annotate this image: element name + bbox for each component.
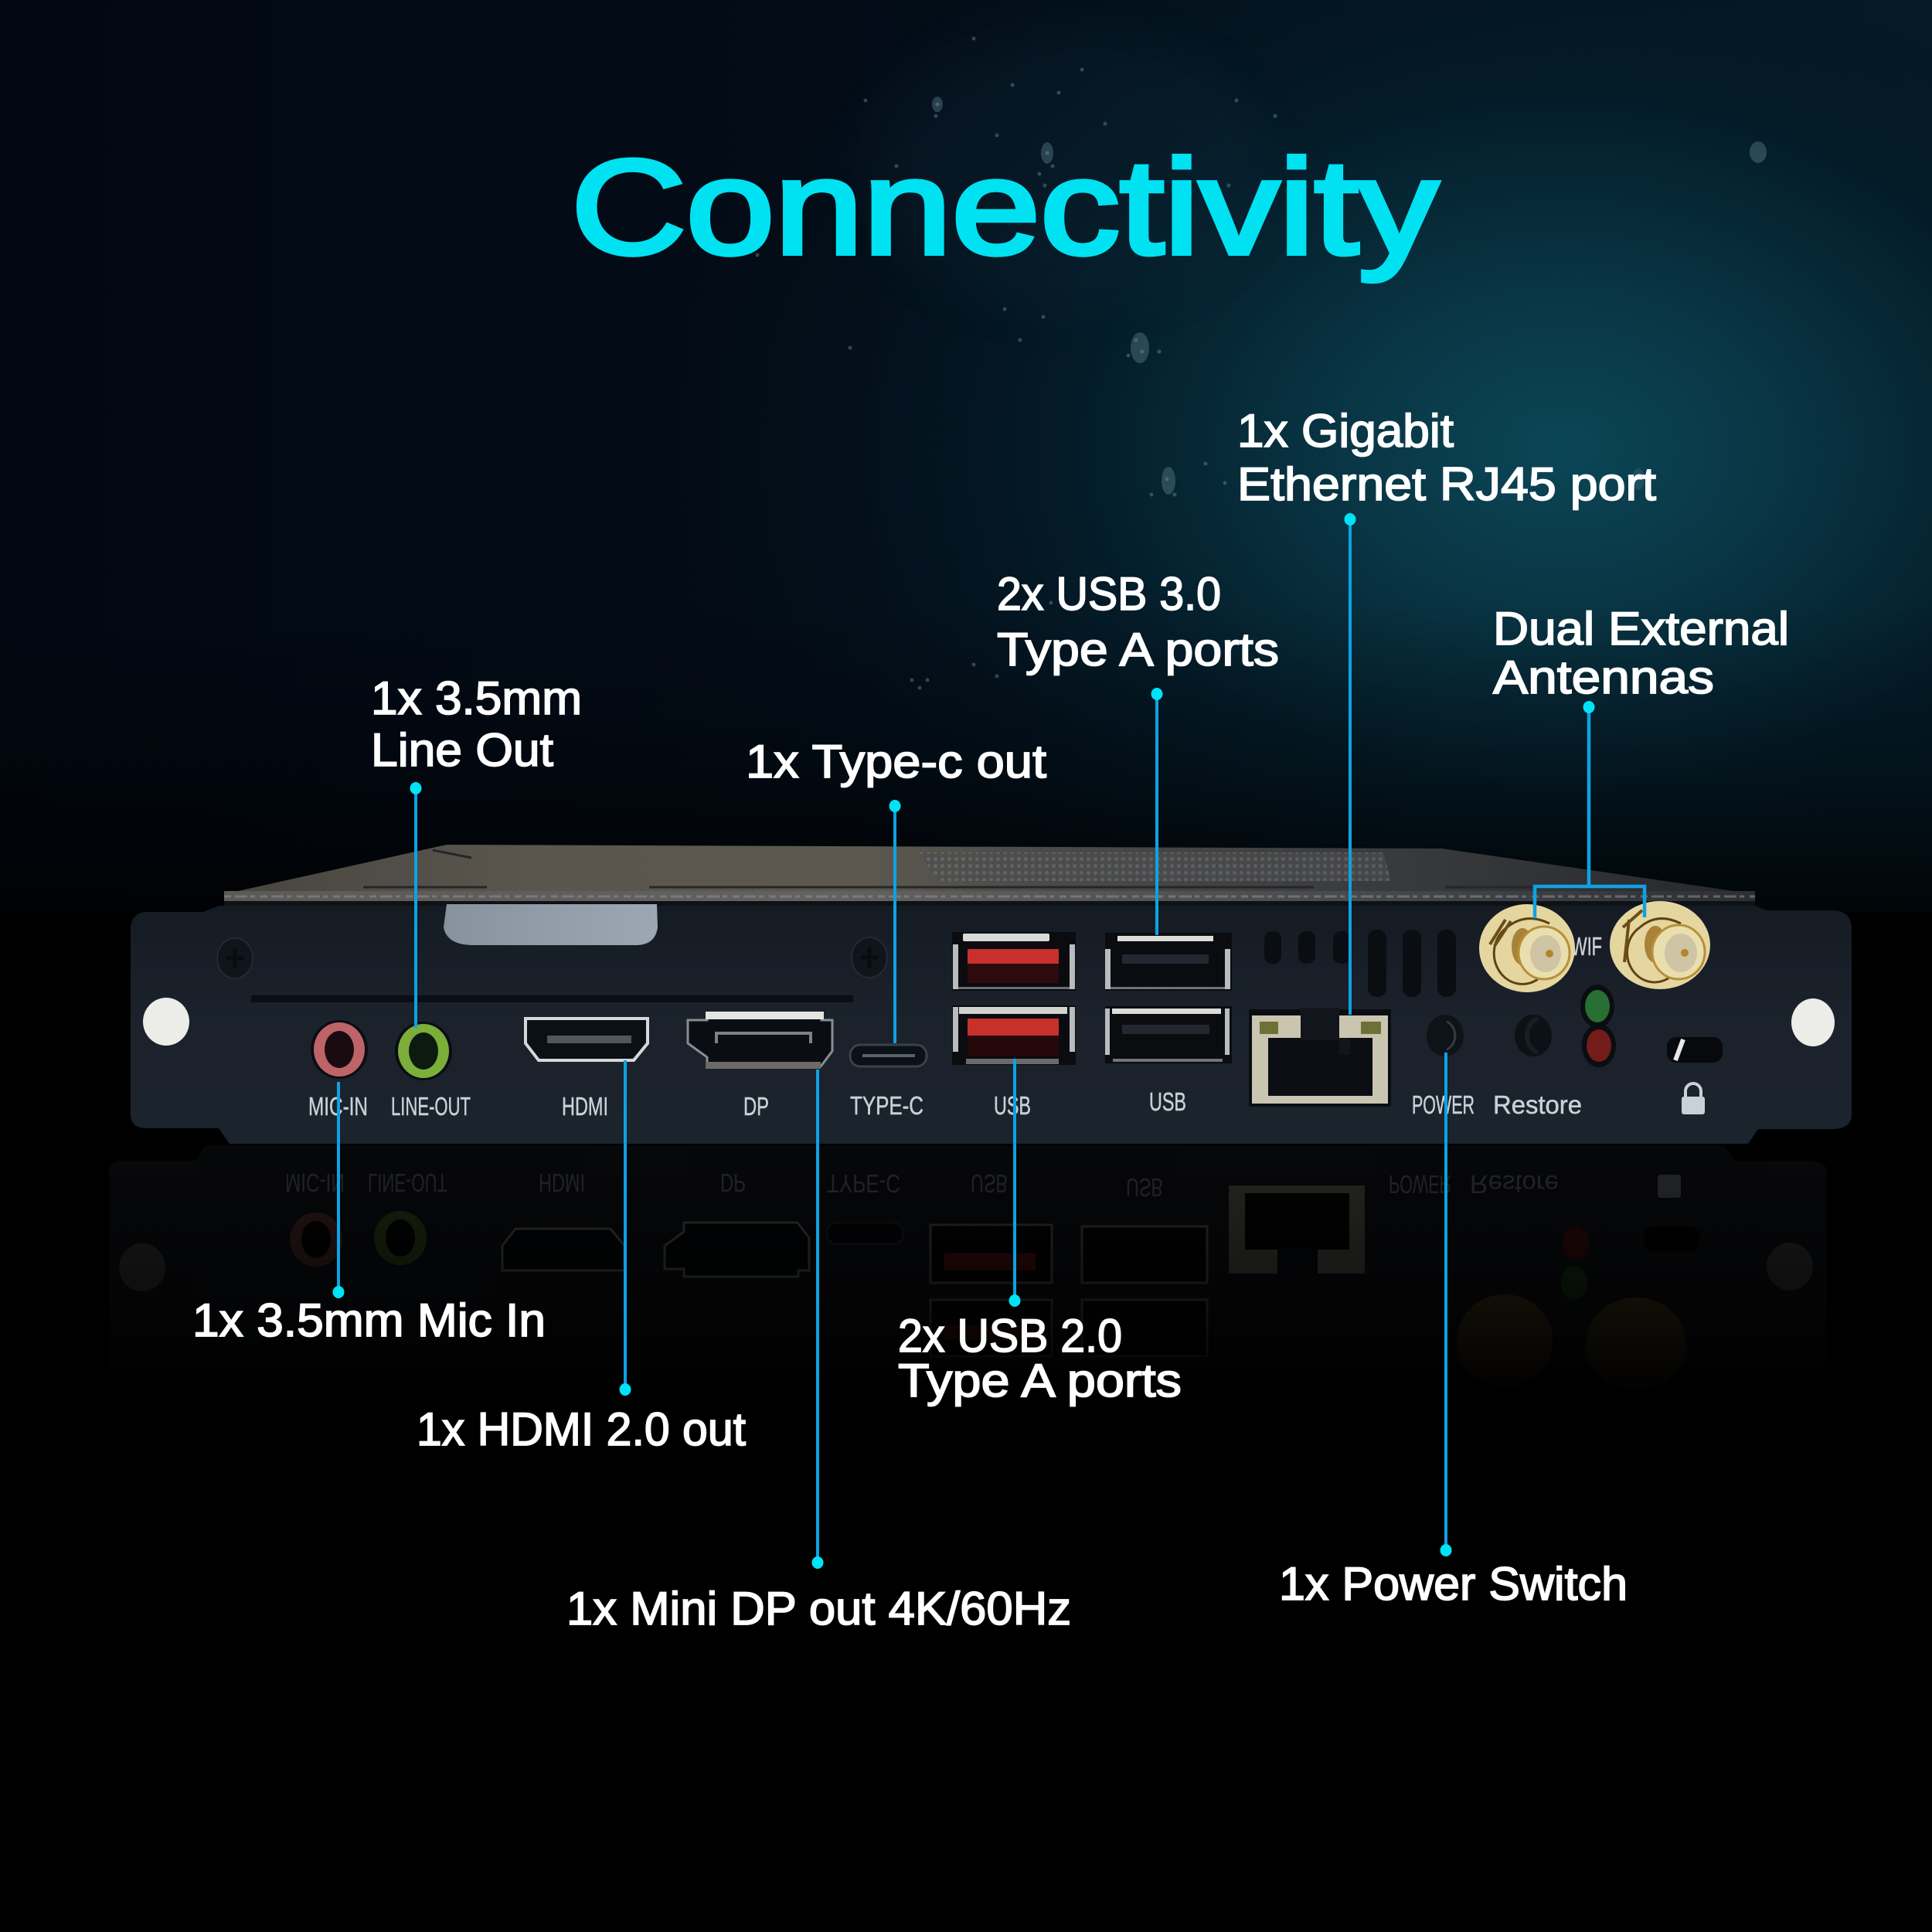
device reflection — [0, 1144, 1932, 1399]
right panel screw — [852, 937, 887, 978]
silk label: DP: DP — [743, 1092, 769, 1121]
port: RJ45 ethernet — [1249, 1008, 1391, 1107]
perforated vent on top — [918, 852, 1391, 881]
callout line: power switch — [1440, 1053, 1451, 1556]
label: dual antennas — [1493, 603, 1789, 703]
device reflection: Restore — [1470, 1170, 1559, 1199]
silk label: LINE-OUT: LINE-OUT — [391, 1092, 471, 1121]
right antenna connector — [1610, 901, 1710, 989]
silk label: POWER: POWER — [1412, 1090, 1475, 1119]
power button — [1427, 1015, 1464, 1056]
tape sticker — [444, 904, 658, 945]
label: line out: 1x 3.5mm — [371, 672, 582, 724]
lock icon — [1682, 1083, 1705, 1114]
label: dual antennas: Antennas — [1493, 651, 1714, 703]
label: USB 2.0: 2x USB 2.0 — [898, 1310, 1122, 1362]
port: HDMI — [526, 1019, 648, 1060]
silk label: HDMI: HDMI — [562, 1092, 608, 1121]
label: gigabit ethernet — [1237, 405, 1656, 510]
green LED — [1580, 985, 1614, 1028]
label: USB 3.0: 2x USB 3.0 — [997, 568, 1221, 620]
label: line out — [371, 672, 582, 776]
label: USB 3.0: Type A ports — [997, 624, 1279, 675]
silk label: Restore: Restore — [1493, 1090, 1582, 1119]
device reflection: USB — [971, 1169, 1008, 1198]
port: DisplayPort — [688, 1012, 832, 1069]
callout line: mini DP — [811, 1070, 824, 1569]
port: USB black bottom — [1105, 1006, 1232, 1063]
left antenna connector — [1479, 904, 1575, 992]
callout line: USB 3.0 — [1151, 688, 1162, 935]
right mounting hole — [1791, 998, 1835, 1046]
port: USB black top — [1105, 933, 1232, 991]
rear plate with flanges — [131, 906, 1852, 1144]
label: USB 2.0: Type A ports — [898, 1355, 1182, 1406]
left mounting hole — [143, 998, 189, 1046]
red LED — [1582, 1024, 1616, 1067]
silk label: USB right: USB — [1149, 1087, 1186, 1116]
restore button — [1515, 1015, 1552, 1056]
label: USB 3.0 — [997, 568, 1279, 675]
device reflection: DP — [720, 1168, 746, 1197]
silk label: TYPE-C: TYPE-C — [850, 1091, 923, 1120]
lock slider switch — [1667, 1037, 1723, 1063]
device reflection: USB — [1126, 1173, 1163, 1202]
chassis front lip — [224, 891, 1755, 901]
callout line: dual antennas — [1535, 701, 1645, 918]
top surface of chassis — [224, 845, 1755, 913]
device reflection: POWER — [1389, 1170, 1451, 1199]
ventilation slots — [1264, 930, 1456, 997]
device reflection: TYPE-C — [827, 1169, 900, 1198]
device reflection: MIC-IN — [285, 1168, 345, 1197]
label: line out: Line Out — [371, 724, 553, 776]
label: power switch: 1x Power Switch — [1279, 1558, 1628, 1610]
callout line: USB 2.0 — [1009, 1059, 1020, 1307]
silk label: USB left: USB — [994, 1091, 1031, 1120]
label: dual antennas: Dual External — [1493, 603, 1789, 655]
port: USB 3.0 red top — [952, 932, 1076, 991]
device: mini PC rear panel — [131, 845, 1852, 1144]
callout line: HDMI — [620, 1060, 631, 1396]
silk label: MIC-IN: MIC-IN — [308, 1092, 368, 1121]
label: gigabit ethernet: 1x Gigabit — [1237, 405, 1454, 457]
port: line out — [395, 1022, 452, 1080]
callout line: line out — [410, 782, 422, 1028]
panel slot — [251, 995, 853, 1002]
port: mic in — [311, 1020, 368, 1079]
label: mic in: 1x 3.5mm Mic In — [192, 1294, 546, 1346]
left panel screw — [217, 938, 253, 978]
label: gigabit ethernet: Ethernet RJ45 port — [1237, 458, 1656, 510]
title: Connectivity — [571, 131, 1438, 282]
label: mini DP: 1x Mini DP out 4K/60Hz — [566, 1583, 1071, 1634]
port: USB 3.0 red bottom — [952, 1005, 1076, 1065]
callout line: type-c — [889, 800, 901, 1043]
callout line: mic in — [332, 1082, 345, 1298]
callout line: gigabit ethernet — [1345, 513, 1355, 1015]
label: type-c: 1x Type-c out — [746, 736, 1046, 787]
label: HDMI: 1x HDMI 2.0 out — [417, 1403, 746, 1455]
top surface seams — [363, 850, 1584, 887]
port: Type-C — [850, 1045, 927, 1066]
label: USB 2.0 — [898, 1310, 1182, 1406]
device reflection: LINE-OUT — [368, 1168, 447, 1197]
device reflection: HDMI — [539, 1168, 585, 1197]
silk label: WIFI: WIF — [1571, 932, 1602, 961]
